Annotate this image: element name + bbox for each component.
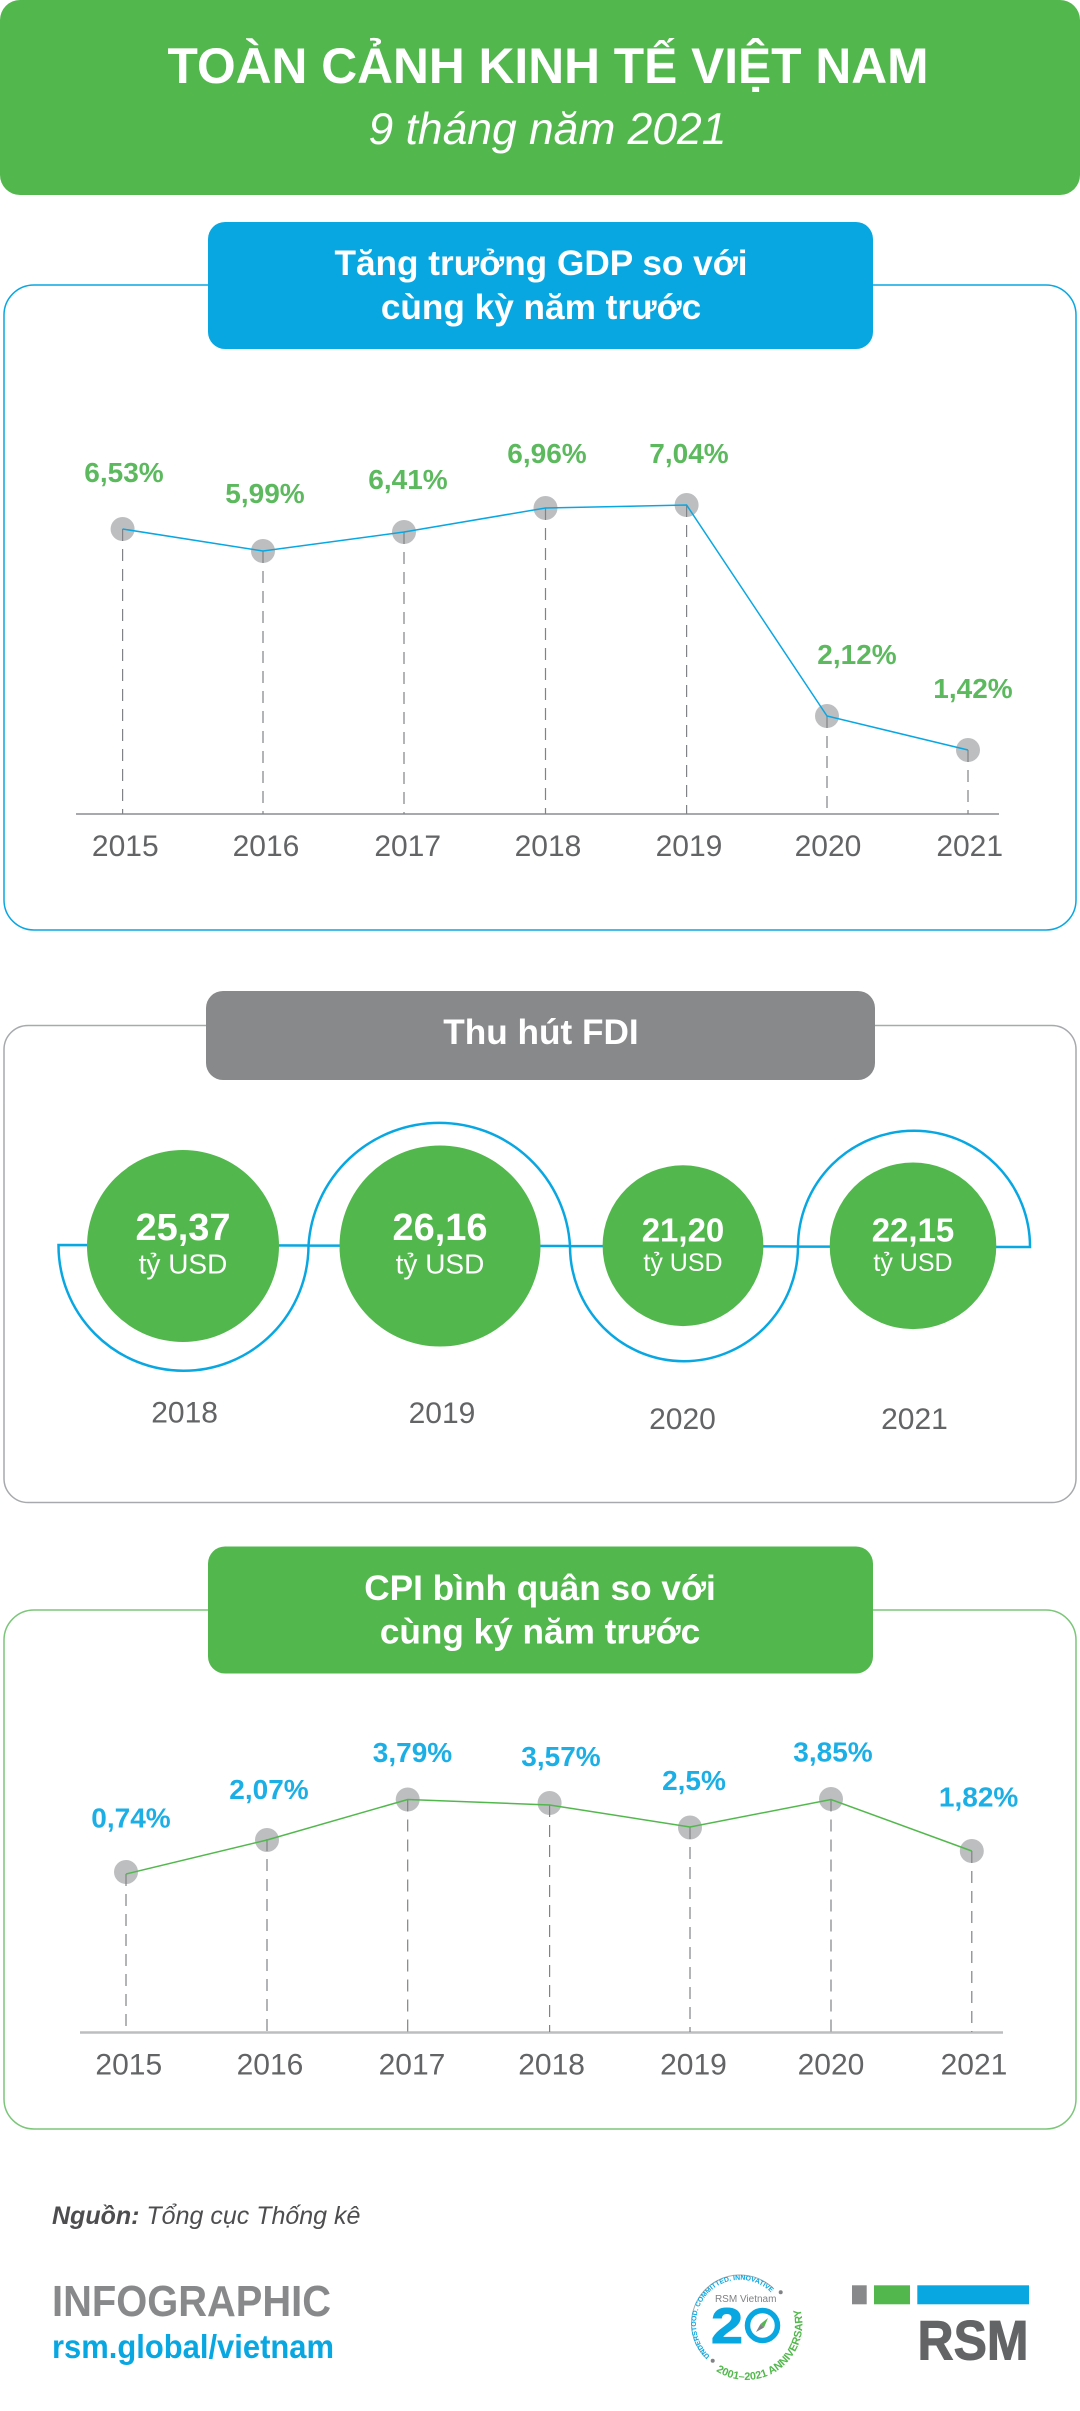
heading: GDP growth: cùng kỳ năm trước	[381, 288, 701, 327]
data circle: 2020: 2020	[649, 1403, 716, 1436]
data circle: 2019	[340, 1146, 540, 1430]
footer link: rsm.global/vietnam	[52, 2328, 334, 2365]
logo: RSM: RSM	[918, 2308, 1028, 2371]
chart: CPI line chart: 2019	[660, 2048, 727, 2082]
chart: GDP line chart: 7,04%	[649, 438, 729, 469]
heading: CPI: cùng ký năm trước	[380, 1612, 700, 1652]
chart: CPI line chart: 3,57%	[521, 1741, 601, 1772]
chart: GDP line chart	[76, 438, 1013, 863]
heading: CPI: CPI bình quân so với	[364, 1569, 716, 1608]
chart: GDP line chart: 2015	[92, 830, 159, 863]
logo: RSM	[852, 2285, 1029, 2371]
source note: Nguồn: Tổng cục Thống kê	[52, 2202, 360, 2230]
chart: GDP line chart: 2021	[936, 830, 1003, 863]
panel: FDI	[4, 991, 1076, 1502]
icon: 20th anniversary badge: 2	[711, 2298, 743, 2354]
chart: CPI line chart: 3,79%	[373, 1737, 452, 1768]
chart: CPI line chart: 2015	[95, 2048, 162, 2082]
chart: CPI line chart: 2016	[237, 2048, 303, 2082]
heading: FDI	[206, 991, 875, 1080]
chart: CPI line chart: 2017	[379, 2048, 445, 2082]
data circle: 2021: 22,15	[872, 1212, 954, 1248]
data circle: 2021	[830, 1162, 996, 1436]
chart: CPI line chart: 3,85%	[793, 1736, 873, 1768]
subtitle: 9 tháng năm 2021	[369, 105, 726, 154]
chart: GDP line chart: 2018	[515, 830, 581, 863]
icon: 20th anniversary badge	[691, 2274, 802, 2380]
data circle: 2018: 2018	[151, 1396, 218, 1430]
title: TOÀN CẢNH KINH TẾ VIỆT NAM	[168, 38, 928, 94]
data circle: 2019: 26,16	[392, 1207, 488, 1249]
heading: CPI	[208, 1546, 873, 1674]
chart: CPI line chart: 2021	[941, 2048, 1007, 2082]
header banner	[0, 0, 1080, 195]
chart: CPI line chart: 2018	[518, 2048, 585, 2082]
panel: CPI	[4, 1546, 1076, 2129]
chart: CPI line chart: 0,74%	[91, 1802, 171, 1834]
heading: FDI: Thu hút FDI	[443, 1013, 639, 1052]
data circle: 2021: 2021	[881, 1403, 948, 1436]
chart: CPI line chart: 2020	[798, 2048, 864, 2082]
chart: GDP line chart: 2019	[656, 830, 722, 863]
chart: CPI line chart: 1,82%	[939, 1782, 1018, 1812]
heading: GDP growth: Tăng trưởng GDP so với	[334, 244, 748, 283]
chart: CPI line chart: 2,07%	[229, 1774, 309, 1805]
chart: GDP line chart: 5,99%	[225, 478, 305, 509]
chart: GDP line chart: 2017	[374, 830, 441, 863]
icon: 20th anniversary badge: 2001–2021 ANNIVERSARY	[716, 2310, 802, 2380]
heading: GDP growth	[208, 222, 873, 349]
data circle: 2020: tỷ USD	[643, 1249, 723, 1277]
data circle: 2018: 25,37	[135, 1207, 231, 1249]
data circle: 2018: tỷ USD	[139, 1248, 227, 1280]
chart: GDP line chart: 1,42%	[933, 673, 1013, 704]
chart: GDP line chart: 6,53%	[84, 457, 164, 488]
chart: CPI line chart: 2,5%	[662, 1765, 726, 1796]
icon: 20th anniversary badge: RSM Vietnam	[715, 2294, 776, 2305]
chart: GDP line chart: 2,12%	[817, 639, 897, 670]
chart: GDP line chart: 2016	[233, 830, 299, 863]
chart: GDP line chart: 6,96%	[507, 438, 587, 469]
chart: CPI line chart	[80, 1736, 1018, 2082]
data circle: 2018	[87, 1150, 279, 1430]
data circle: 2019: 2019	[409, 1397, 475, 1430]
chart: GDP line chart: 2020	[795, 830, 861, 863]
data circle: 2020: 21,20	[642, 1212, 724, 1248]
icon: 20th anniversary badge: UNDERSTOOD. COMMITTED. INNOVATIVE	[691, 2274, 774, 2360]
data circle: 2021: tỷ USD	[873, 1249, 953, 1277]
panel: GDP growth	[4, 222, 1076, 930]
chart: FDI wave line	[58, 1123, 1030, 1371]
data circle: 2020	[603, 1165, 763, 1436]
data circle: 2019: tỷ USD	[396, 1248, 484, 1280]
chart: GDP line chart: 6,41%	[368, 464, 448, 495]
footer label: INFOGRAPHIC: INFOGRAPHIC	[52, 2277, 331, 2326]
